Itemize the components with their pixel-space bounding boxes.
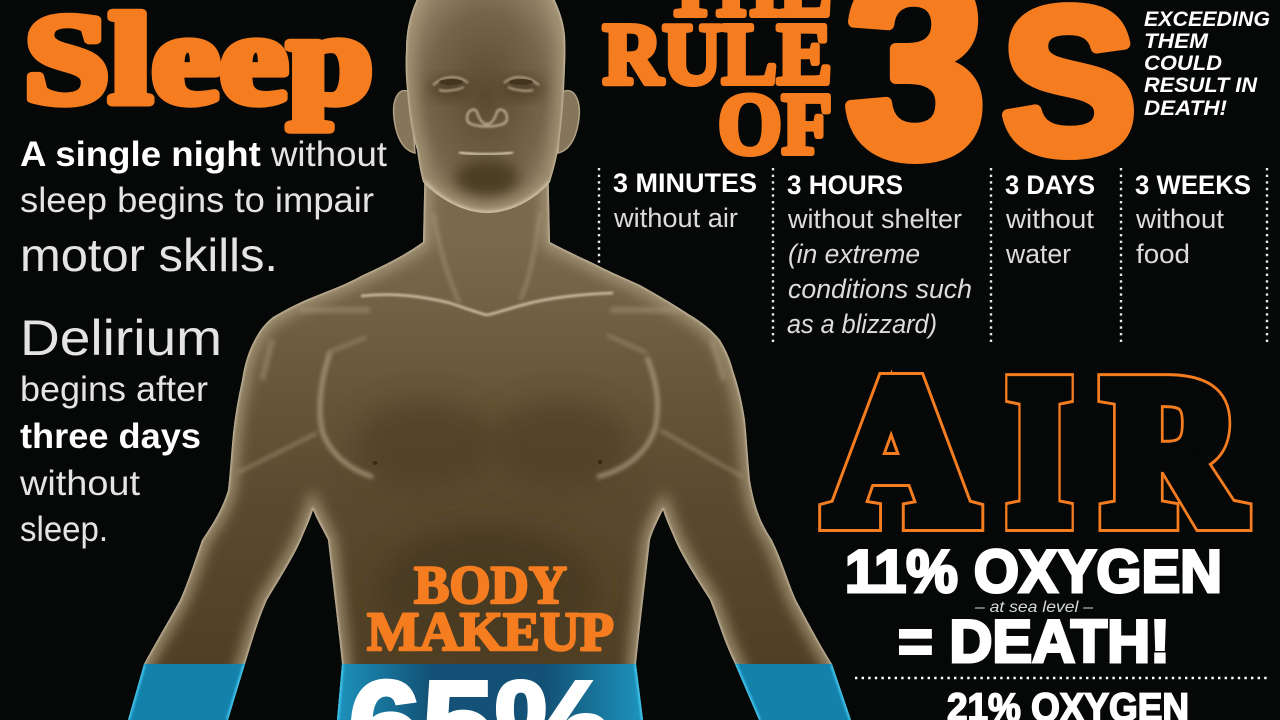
column: 3 hours: 3 HOURS [787, 170, 903, 200]
word: RULE: RULE [603, 5, 832, 102]
heading: AIR outlined: A [828, 336, 974, 565]
column: 3 hours: as a blizzard) [787, 309, 937, 339]
= death: = DEATH! [898, 608, 1170, 675]
line: sleep begins: sleep begins to impair [20, 181, 374, 220]
line 2: THEM [1144, 30, 1209, 53]
word: OF: OF [718, 75, 832, 172]
column: 3 weeks: without [1135, 204, 1224, 234]
heading: body makeup [367, 555, 614, 662]
line: delirium: Delirium [20, 310, 222, 366]
head and face [406, 0, 565, 213]
table: rule of 3s columns [599, 168, 1267, 345]
line: without: without [19, 464, 140, 503]
callout: exceeding them could result in death [1144, 8, 1270, 120]
column: 3 days: without [1005, 204, 1094, 234]
line: a single night: A single night without [20, 135, 387, 174]
column: 3 hours [787, 170, 972, 339]
line 4: RESULT IN [1144, 74, 1258, 97]
word: body: BODY [414, 555, 567, 615]
heading: The Rule of 3s [603, 0, 1136, 211]
heading: AIR outlined: I [1009, 336, 1070, 565]
text block: sleep facts [19, 135, 387, 549]
line: three days: three days [20, 417, 201, 456]
line 3: COULD [1144, 52, 1222, 75]
line 5: DEATH! [1144, 97, 1227, 120]
heading: AIR outlined: R [1105, 336, 1242, 565]
blue water-level band [100, 664, 880, 720]
at sea level: – at sea level – [974, 599, 1093, 616]
heading: AIR outlined [828, 336, 1242, 565]
line 1: EXCEEDING [1144, 8, 1270, 31]
human figure illustration [100, 0, 880, 720]
line: motor skills: motor skills. [20, 229, 278, 281]
air facts [845, 538, 1267, 720]
11% oxygen: 11% OXYGEN [845, 538, 1222, 605]
heading: AIR outlined: R [1105, 336, 1242, 565]
column: 3 minutes [613, 168, 757, 233]
heading: AIR outlined: A [828, 336, 974, 565]
heading: AIR outlined: I [1009, 336, 1070, 565]
torso and arms [128, 150, 851, 720]
ears [394, 91, 579, 153]
column: 3 minutes: 3 MINUTES [613, 168, 757, 198]
line: begins after: begins after [20, 370, 208, 409]
column: 3 hours: (in extreme [788, 239, 920, 269]
word: makeup: MAKEUP [367, 601, 614, 662]
column: 3 weeks [1135, 170, 1251, 269]
column: 3 weeks: food [1136, 239, 1190, 269]
column: 3 hours: without shelter [787, 204, 962, 234]
column: 3 hours: conditions such [788, 274, 972, 304]
column: 3 weeks: 3 WEEKS [1135, 170, 1251, 200]
column: 3 minutes: without air [613, 203, 738, 233]
line: sleep: sleep. [20, 510, 108, 549]
column: 3 days: 3 DAYS [1005, 170, 1095, 200]
column: 3 days: water [1005, 239, 1071, 269]
column: 3 days [1005, 170, 1095, 269]
